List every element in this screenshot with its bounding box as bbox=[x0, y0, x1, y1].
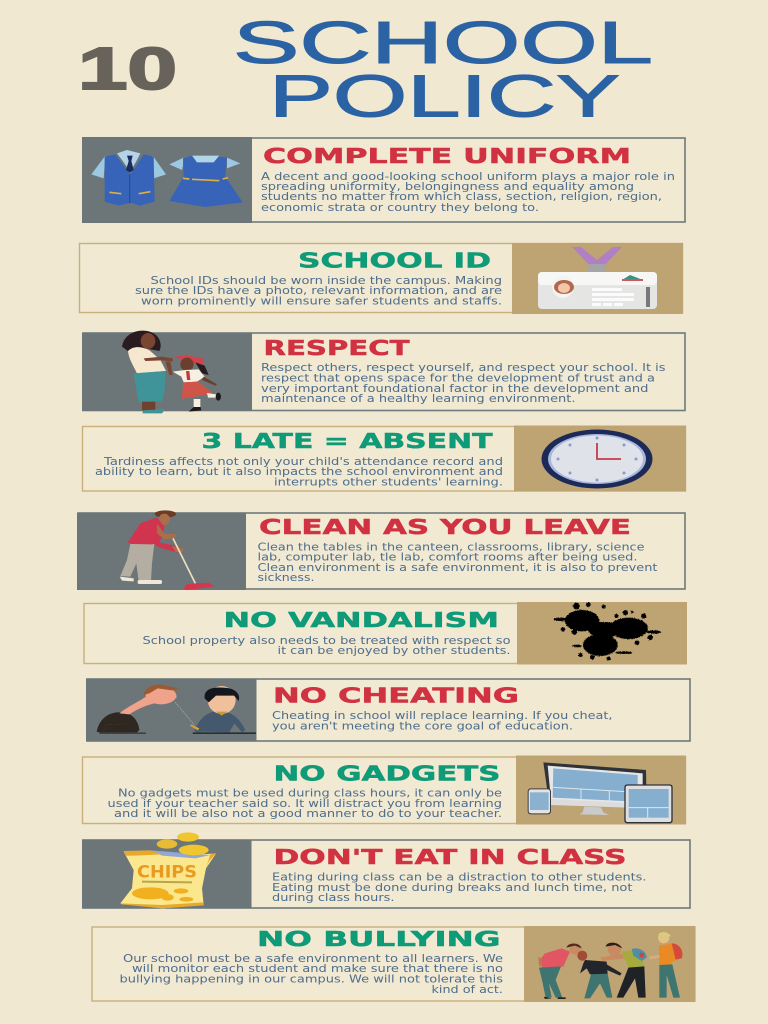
panel: no vandalism bbox=[84, 602, 687, 664]
panel: school id bbox=[80, 243, 683, 314]
body text: No gadgets must be used during class hours, it can only be bbox=[118, 786, 502, 800]
body text bbox=[258, 540, 658, 584]
body text bbox=[261, 361, 666, 405]
heading: 3 LATE = ABSENT bbox=[202, 429, 493, 453]
body text: ability to learn, but it also impacts the school environment and bbox=[95, 465, 503, 478]
icon: ink splat bbox=[554, 602, 661, 661]
body text: students no matter from which class, section, religion, region, bbox=[261, 190, 662, 203]
body text: during class hours. bbox=[272, 891, 394, 904]
body text: Eating must be done during breaks and lunch time, not bbox=[272, 881, 633, 894]
icon: id card with lanyard bbox=[538, 247, 657, 309]
body text: respect that opens space for the development of trust and a bbox=[261, 372, 655, 384]
body text: Our school must be a safe environment to all learners. We bbox=[123, 952, 503, 965]
body text: worn prominently will ensure safer students and staffs. bbox=[141, 294, 502, 308]
body text bbox=[135, 274, 502, 308]
panel: clean as you leave bbox=[77, 510, 685, 590]
icon: student cheating bbox=[97, 685, 256, 734]
body text: maintenance of a healthy learning environment. bbox=[261, 392, 576, 405]
body text: A decent and good-looking school uniform plays a major role in bbox=[261, 170, 675, 183]
body text bbox=[272, 709, 612, 732]
body text: School IDs should be worn inside the campus. Making bbox=[150, 274, 502, 287]
icon: monitor, phone and tablet bbox=[528, 762, 673, 823]
body text: Clean environment is a safe environment, it is also to prevent bbox=[258, 561, 658, 574]
icon: mother and child bbox=[122, 331, 221, 413]
body text: you aren't meeting the core goal of education. bbox=[272, 720, 573, 732]
body text: very important foundational factor in the development and bbox=[261, 382, 648, 395]
body text: Cheating in school will replace learning. If you cheat, bbox=[272, 709, 612, 722]
icon: clock bbox=[542, 430, 652, 488]
body text bbox=[108, 786, 502, 820]
body text bbox=[120, 952, 503, 996]
body text: sickness. bbox=[258, 571, 314, 584]
body text bbox=[95, 455, 503, 488]
panel: no gadgets bbox=[82, 756, 686, 824]
heading: SCHOOL ID bbox=[298, 248, 491, 272]
icon: person sweeping bbox=[120, 510, 214, 590]
icon: bag of chips bbox=[120, 832, 216, 908]
title: SCHOOL bbox=[233, 10, 653, 76]
body text: Tardiness affects not only your child's attendance record and bbox=[103, 455, 503, 468]
body text bbox=[142, 634, 511, 657]
panel: no bullying bbox=[92, 926, 695, 1002]
body text: interrupts other students' learning. bbox=[274, 476, 503, 488]
body text: Clean the tables in the canteen, classrooms, library, science bbox=[258, 540, 645, 554]
body text bbox=[261, 170, 675, 214]
icon: students bullying bbox=[538, 932, 682, 999]
title number 10: 10 bbox=[78, 36, 177, 102]
body text: sure the IDs have a photo, relevant information, and are bbox=[135, 284, 502, 297]
icon: bag of chips: CHIPS bbox=[137, 863, 197, 882]
body text bbox=[272, 870, 646, 904]
body text: Respect others, respect yourself, and respect your school. It is bbox=[261, 361, 666, 374]
heading: NO CHEATING bbox=[273, 684, 519, 708]
title bbox=[233, 10, 653, 130]
body text: lab, computer lab, tle lab, comfort rooms after being used. bbox=[258, 550, 638, 564]
body text: School property also needs to be treated with respect so bbox=[142, 634, 511, 647]
heading: NO VANDALISM bbox=[224, 608, 499, 632]
body text: Eating during class can be a distraction to other students. bbox=[272, 870, 646, 884]
panel: 3 late = absent bbox=[82, 426, 686, 492]
panel: don't eat in class bbox=[82, 832, 690, 908]
heading: NO BULLYING bbox=[257, 927, 500, 951]
title: POLICY bbox=[269, 64, 620, 130]
panel: no cheating bbox=[86, 679, 690, 741]
heading: CLEAN AS YOU LEAVE bbox=[259, 515, 631, 539]
body text: economic strata or country they belong to. bbox=[261, 201, 539, 214]
panel: respect bbox=[82, 331, 685, 413]
body text: used if your teacher said so. It will distract you from learning bbox=[108, 797, 502, 810]
body text: kind of act. bbox=[432, 983, 503, 996]
panel: complete uniform bbox=[82, 137, 685, 223]
body text: it can be enjoyed by other students. bbox=[278, 644, 510, 657]
body text: and it will be also not a good manner to do to your teacher. bbox=[114, 807, 502, 820]
heading: NO GADGETS bbox=[274, 762, 500, 786]
heading: COMPLETE UNIFORM bbox=[263, 144, 631, 168]
heading: DON'T EAT IN CLASS bbox=[274, 845, 626, 869]
heading: RESPECT bbox=[264, 336, 410, 360]
body text: spreading uniformity, belongingness and equality among bbox=[261, 180, 634, 193]
body text: bullying happening in our campus. We will not tolerate this bbox=[120, 972, 503, 986]
body text: will monitor each student and make sure that there is no bbox=[132, 962, 503, 975]
icon: school uniforms bbox=[91, 150, 243, 207]
